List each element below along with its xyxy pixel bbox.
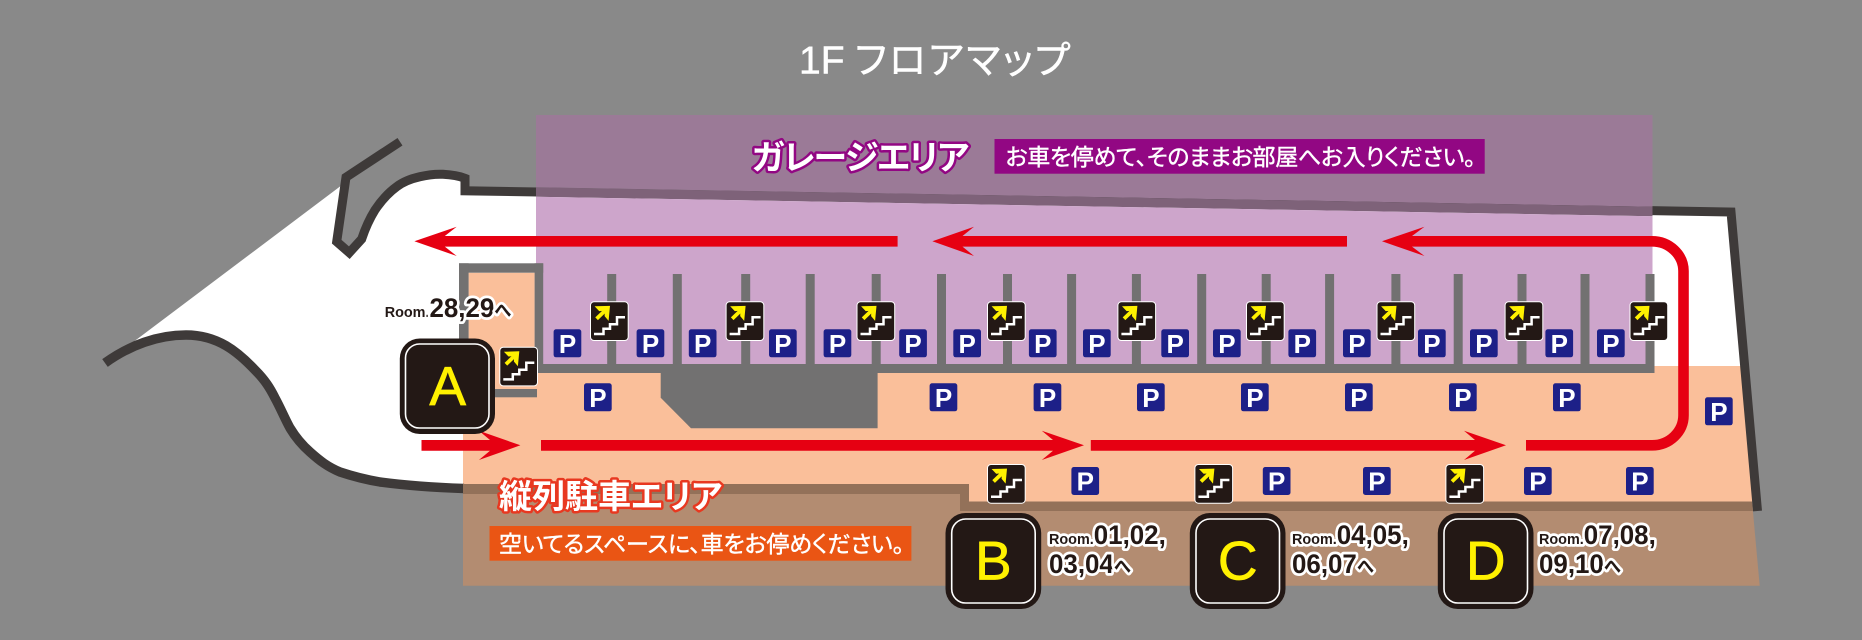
garage overlay: wall section bbox=[536, 187, 1652, 216]
room label: 04-07 bbox=[1292, 520, 1409, 579]
tandem upper row parking icons: P bbox=[1350, 383, 1368, 413]
stair icons: A entrance bbox=[500, 347, 538, 386]
garage structure walls bbox=[459, 263, 1654, 397]
building outer wall: top and right bbox=[337, 142, 1758, 511]
tandem upper row parking icons: P bbox=[935, 383, 952, 413]
tandem upper row parking icons: P bbox=[1246, 383, 1264, 413]
garage parking icons: P bbox=[1218, 329, 1236, 359]
stairway sign C: C bbox=[1218, 530, 1258, 592]
room label: 07-10 bbox=[1539, 520, 1656, 579]
room label: 07-10: Room.07,08, bbox=[1539, 520, 1656, 550]
stair icons: garage row bbox=[590, 302, 1668, 340]
garage parking icons: P bbox=[829, 329, 846, 359]
stairway sign A: A bbox=[429, 355, 466, 417]
garage parking icons: P bbox=[694, 329, 711, 359]
tandem area note: 空いてるスペースに、車をお停めください。 bbox=[499, 525, 904, 559]
tandem upper row parking icons: P bbox=[1142, 383, 1160, 413]
garage parking icons bbox=[554, 329, 1625, 359]
arrow: entrance bbox=[422, 431, 520, 460]
tandem upper row parking icons: P bbox=[1558, 383, 1576, 413]
stairway sign C bbox=[1190, 513, 1286, 609]
tandem lower row parking icons: P bbox=[1631, 466, 1649, 496]
stair icons: lower row bbox=[988, 464, 1484, 503]
room label: 04-07: 06,07へ bbox=[1292, 549, 1374, 579]
arrow: tandem lane 2 bbox=[1091, 431, 1506, 460]
garage parking icons: P bbox=[1088, 329, 1106, 359]
stairway sign D: D bbox=[1466, 530, 1506, 592]
tandem area heading: 縦列駐車エリア bbox=[499, 470, 722, 518]
tandem upper row parking icons: P bbox=[1039, 383, 1056, 413]
room label: 01-04 bbox=[1049, 520, 1166, 579]
room label: 04-07: Room.04,05, bbox=[1292, 520, 1409, 550]
room label: 01-04: Room.01,02, bbox=[1049, 520, 1166, 550]
title: 1F bbox=[799, 40, 845, 82]
garage parking icons: P bbox=[642, 329, 659, 359]
garage overlay: floor section bbox=[536, 197, 1652, 364]
stairway sign A bbox=[400, 338, 495, 434]
stairway sign D bbox=[1438, 513, 1534, 609]
garage parking icons: P bbox=[1294, 329, 1311, 359]
tandem area overlay bbox=[463, 494, 1760, 586]
garage parking icons: P bbox=[1034, 329, 1051, 359]
garage parking icons: P bbox=[1475, 329, 1493, 359]
garage area heading: ガレージエリア bbox=[752, 130, 969, 180]
arrow: curved return route bbox=[1382, 227, 1684, 445]
garage parking icons: P bbox=[904, 329, 922, 359]
garage parking icons: P bbox=[1423, 329, 1441, 359]
tandem lower row parking icons: P bbox=[1077, 466, 1094, 496]
garage parking icons: P bbox=[559, 329, 576, 359]
arrow: tandem lane 1 bbox=[541, 431, 1084, 460]
garage area note: お車を停めて、そのままお部屋へお入りください。 bbox=[1006, 138, 1476, 172]
arrow: garage centre bbox=[932, 227, 1347, 256]
garage parking icons: P bbox=[959, 329, 976, 359]
garage parking icons: P bbox=[774, 329, 792, 359]
garage parking icons: P bbox=[1551, 329, 1568, 359]
tandem lower row parking icons: P bbox=[1368, 466, 1386, 496]
tandem parking floor bbox=[463, 273, 1752, 502]
building outer wall: left curve bbox=[105, 335, 464, 488]
stairway sign B: B bbox=[975, 530, 1012, 592]
garage overlay: upper section bbox=[536, 115, 1652, 207]
tandem upper row parking icons bbox=[584, 383, 1733, 427]
room label: 28,29: Room.28,29へ bbox=[385, 293, 512, 323]
tandem lower row parking icons: P bbox=[1529, 466, 1547, 496]
floor plan: white ground bbox=[120, 174, 1745, 488]
garage parking icons: P bbox=[1602, 329, 1620, 359]
garage parking icons: P bbox=[1348, 329, 1366, 359]
tandem upper row parking icons: P bbox=[1454, 383, 1472, 413]
room label: 07-10: 09,10へ bbox=[1539, 549, 1621, 579]
tandem lower row parking icons bbox=[1071, 466, 1654, 496]
tandem lower row parking icons: P bbox=[1268, 466, 1285, 496]
tandem upper row parking icons: P bbox=[1710, 397, 1728, 427]
arrow: exit west bbox=[414, 227, 898, 256]
stairway sign B bbox=[946, 513, 1041, 609]
garage parking icons: P bbox=[1167, 329, 1184, 359]
wall under tandem overlay bbox=[463, 484, 1753, 511]
dark utility block bbox=[661, 373, 878, 428]
room label: 01-04: 03,04へ bbox=[1049, 549, 1131, 579]
tandem upper row parking icons: P bbox=[589, 383, 607, 413]
title: フロアマップ bbox=[855, 30, 1071, 84]
